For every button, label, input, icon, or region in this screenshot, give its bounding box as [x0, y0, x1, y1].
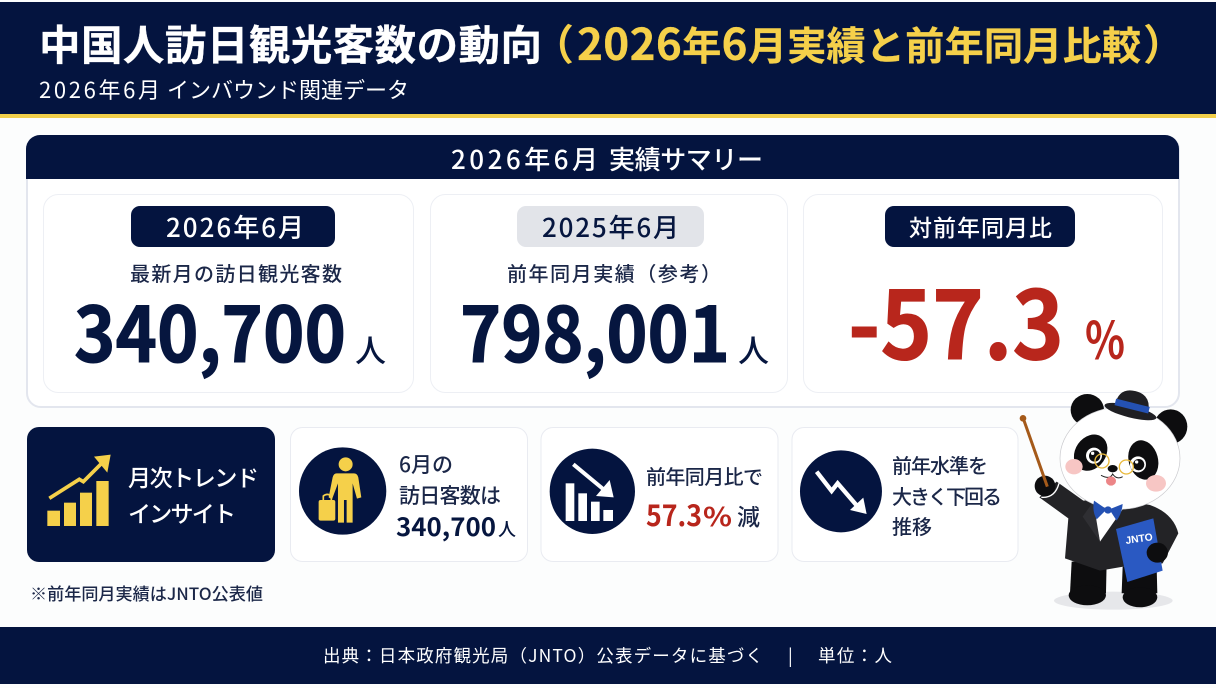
card: year over year	[804, 194, 1162, 392]
header band	[0, 2, 1216, 118]
summary heading bar: 2026年6月	[451, 140, 598, 177]
card: 2026 June	[44, 194, 414, 392]
visitors text	[396, 449, 516, 544]
summary heading bar	[26, 135, 1179, 179]
value: 798,001	[460, 274, 730, 384]
below text: 大きく下回る	[892, 481, 1002, 510]
title: 中国人訪日観光客数の動向	[39, 12, 542, 72]
pointer stick	[1020, 415, 1047, 487]
legs	[1069, 562, 1157, 607]
below text	[892, 450, 1002, 540]
footer band	[0, 627, 1216, 684]
title: ）	[1143, 12, 1185, 73]
bowler hat	[1103, 385, 1161, 424]
card: below last year	[792, 428, 1018, 562]
trend text	[128, 459, 259, 529]
value: 人	[355, 326, 386, 371]
decrease text: %	[703, 497, 732, 534]
card: 2025 June	[430, 194, 788, 392]
subtitle: 2026年6月	[39, 73, 160, 105]
trend text: 月次トレンド	[128, 459, 259, 493]
value: -57.3	[848, 251, 1064, 387]
panel: monthly trend insight	[27, 427, 275, 562]
decrease text	[646, 461, 763, 535]
card: decrease	[541, 428, 778, 562]
visitors text: 訪日客数は	[399, 480, 501, 510]
below text: 前年水準を	[892, 450, 988, 479]
subtitle	[39, 73, 409, 105]
visitors text: 6月の	[399, 449, 453, 479]
source text: |	[788, 643, 793, 668]
icon: zigzag down arrow	[800, 450, 882, 532]
footnote: ※前年同月実績はJNTO公表値	[30, 580, 263, 605]
label: 前年同月実績（参考）	[507, 258, 721, 287]
icon: panda mascot: JNTO	[1125, 532, 1153, 547]
icon: panda mascot	[1020, 385, 1187, 610]
icon: falling bars	[550, 449, 635, 534]
below text: 推移	[892, 511, 932, 540]
visitors text: 人	[498, 516, 516, 542]
panel: summary	[26, 135, 1179, 407]
label: 最新月の訪日観光客数	[130, 258, 342, 287]
summary heading bar: 実績サマリー	[609, 140, 763, 177]
title: （	[532, 12, 574, 73]
source text: 出典：日本政府観光局（JNTO）公表データに基づく	[323, 643, 763, 668]
decrease text: 57.3	[646, 493, 702, 535]
card: visitors	[290, 428, 528, 562]
icon: traveller with suitcase	[299, 447, 386, 535]
pill: 対前年同月比: 対前年同月比	[909, 209, 1052, 243]
visitors text: 340,700	[396, 508, 496, 544]
subtitle: インバウンド関連データ	[167, 73, 409, 105]
jacket	[1039, 482, 1178, 571]
trend text: インサイト	[128, 495, 236, 529]
decrease text: 減	[737, 498, 760, 532]
value: 人	[738, 326, 769, 371]
title	[39, 9, 1185, 73]
pill: 2025年6月: 2025年6月	[542, 208, 679, 245]
source text: 単位：人	[818, 643, 892, 668]
pill: 2025年6月	[517, 206, 704, 247]
title: 2026年6月実績と前年同月比較	[577, 9, 1141, 73]
icon: rising bar chart	[47, 455, 111, 526]
pill: 2026年6月: 2026年6月	[166, 208, 304, 245]
decrease text: 前年同月比で	[646, 461, 763, 490]
pill: 2026年6月	[131, 206, 335, 247]
value: %	[1085, 299, 1125, 374]
pill: 対前年同月比	[885, 206, 1075, 247]
value: 340,700	[74, 274, 346, 384]
